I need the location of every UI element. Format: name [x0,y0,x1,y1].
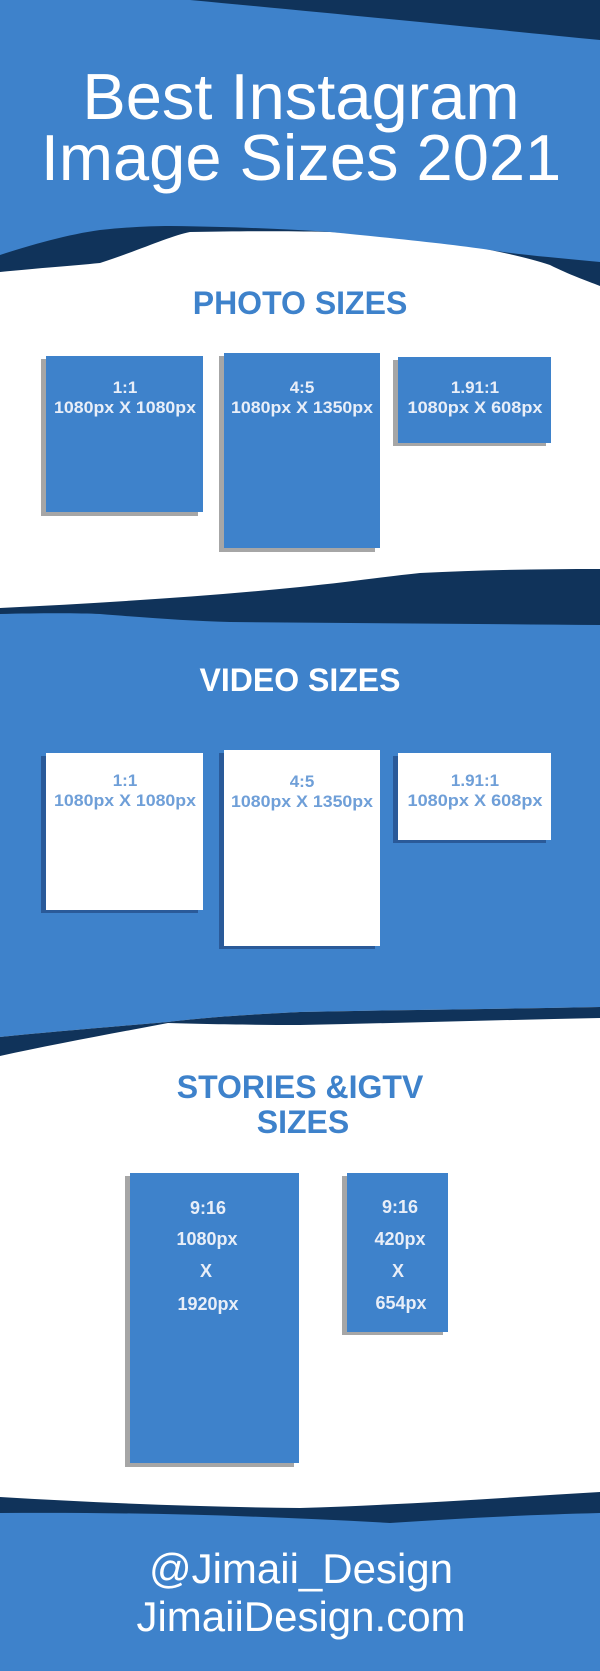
video box 4:5: 4:5 [290,772,314,791]
igtv box 420x654: 420px [374,1229,426,1249]
heading: photo sizes: PHOTO SIZES [193,285,407,321]
video box 1:1 [41,753,203,913]
photo box 1.91:1 [393,357,551,446]
footer text [136,1545,466,1640]
video box 1:1: 1080px X 1080px [54,791,197,810]
photo box 4:5 [219,353,380,552]
heading: stories & igtv sizes: STORIES &IGTV [177,1069,424,1105]
photo box 4:5: 4:5 [290,378,314,397]
video box 1.91:1: 1080px X 608px [408,791,543,810]
footer text: JimaiiDesign.com [136,1593,466,1640]
footer text: @Jimaii_Design [149,1545,453,1592]
stories box 1080x1920 [125,1173,299,1467]
igtv box 420x654: X [392,1261,404,1281]
video box 4:5 [219,750,380,949]
video box 1.91:1: 1.91:1 [451,771,499,790]
stories box 1080x1920: 1920px [177,1294,239,1314]
photo box 1.91:1: 1080px X 608px [408,398,543,417]
heading: stories & igtv sizes [177,1069,424,1140]
photo box 4:5: 1080px X 1350px [231,398,374,417]
video band [0,569,600,1056]
header band [0,0,600,600]
video box 1:1: 1:1 [113,771,137,790]
photo box 1:1: 1:1 [113,378,137,397]
video box 4:5: 1080px X 1350px [231,792,374,811]
video box 1.91:1 [393,753,551,843]
photo box 1.91:1: 1.91:1 [451,378,499,397]
stories box 1080x1920: 9:16 [190,1198,226,1218]
stories box 1080x1920: X [200,1261,212,1281]
stories box 1080x1920: 1080px [176,1229,238,1249]
title: Image Sizes 2021 [41,121,561,194]
igtv box 420x654: 9:16 [382,1197,418,1217]
heading: video sizes: VIDEO SIZES [200,662,400,698]
igtv box 420x654 [342,1173,448,1335]
heading: stories & igtv sizes: SIZES [257,1104,349,1140]
igtv box 420x654: 654px [375,1293,427,1313]
photo box 1:1 [41,356,203,516]
footer band [0,1492,600,1671]
title [41,60,561,194]
title: Best Instagram [82,60,520,133]
photo box 1:1: 1080px X 1080px [54,398,197,417]
